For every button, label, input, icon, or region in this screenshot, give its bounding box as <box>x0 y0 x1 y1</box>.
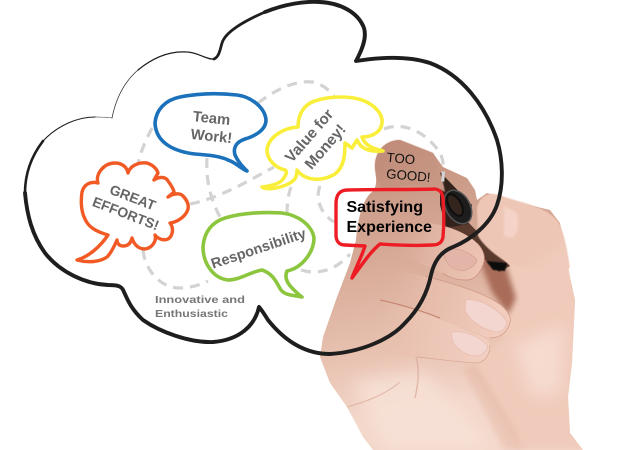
hand holding marker <box>310 130 590 450</box>
bubble: Satisfying Experience <box>336 189 444 278</box>
label: Great Efforts: EFFORTS! <box>90 193 161 233</box>
label: Too Good <box>386 150 431 185</box>
label: Team Work: Work! <box>190 127 233 147</box>
label: Team Work <box>190 109 233 147</box>
ring finger <box>380 272 510 338</box>
little finger <box>372 302 490 363</box>
thumb <box>477 194 570 271</box>
bubble: Value for Money <box>262 97 383 189</box>
marker pen <box>439 172 510 272</box>
label: Great Efforts: GREAT <box>108 181 158 214</box>
bubble: Great Efforts <box>77 163 188 262</box>
label: Team Work: Team <box>192 109 231 129</box>
caption: Innovative and Enthusiastic: Innovative and <box>155 294 245 306</box>
label: Value for Money: Value for <box>282 106 337 166</box>
thought cloud outline <box>25 2 502 354</box>
index fingertip <box>375 140 445 192</box>
label: Too Good: TOO <box>386 150 416 167</box>
label: Satisfying Experience <box>346 199 432 236</box>
label: Too Good: GOOD! <box>386 166 431 185</box>
caption: Innovative and Enthusiastic: Enthusiastic <box>155 308 228 320</box>
middle finger <box>398 223 484 280</box>
bubble: Responsibility <box>203 213 314 297</box>
label: Value for Money: Money! <box>302 121 350 173</box>
bubble: Team Work <box>155 94 266 171</box>
label: Satisfying Experience: Satisfying <box>346 199 423 216</box>
label: Satisfying Experience: Experience <box>346 219 432 236</box>
label: Responsibility: Responsibility <box>209 226 308 273</box>
dashed connector circles <box>138 82 443 288</box>
caption: Innovative and Enthusiastic <box>155 294 245 320</box>
